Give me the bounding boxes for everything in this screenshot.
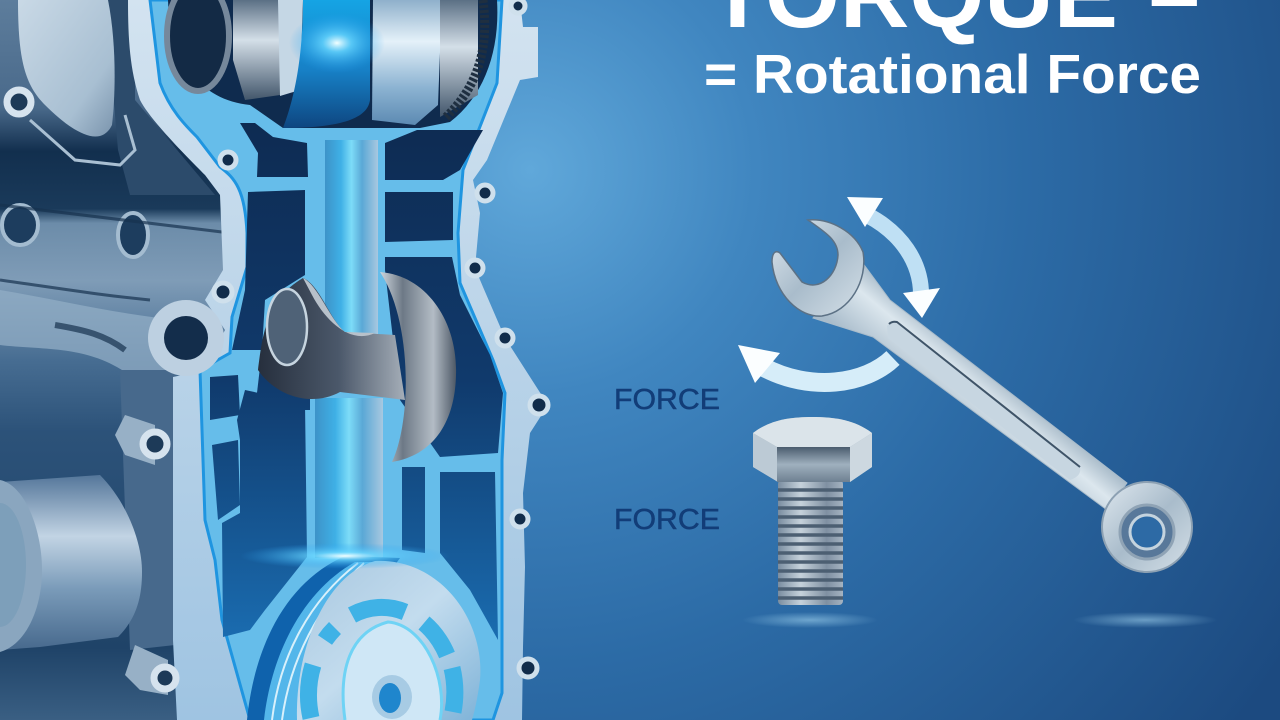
shadow: wrench xyxy=(1073,612,1217,628)
pulley wheel xyxy=(240,543,480,720)
panel right of cylinder xyxy=(120,370,175,650)
boss arm: lower xyxy=(125,645,168,695)
cylinder: lower left xyxy=(0,475,142,652)
casting rib xyxy=(30,115,135,165)
arrow: upper arc xyxy=(847,197,921,297)
wrench open jaw xyxy=(772,220,864,316)
cavities xyxy=(210,123,503,640)
seams xyxy=(0,205,222,300)
rib to port xyxy=(0,290,180,372)
panel: engine cutaway xyxy=(0,0,548,720)
inner web xyxy=(150,0,505,720)
bolt thread xyxy=(778,480,843,605)
boss arm: left xyxy=(115,415,155,465)
dark band beside casting xyxy=(105,0,215,195)
bolt head xyxy=(753,417,872,482)
title xyxy=(704,0,1201,105)
block recesses xyxy=(2,205,148,257)
wrench ring end xyxy=(1102,482,1192,572)
arrowhead: upper arc end xyxy=(903,288,940,318)
housing wall outer xyxy=(128,0,548,720)
block bosses xyxy=(7,90,176,689)
engine block body xyxy=(0,0,245,720)
label: force lower: FORCE xyxy=(614,504,720,536)
port xyxy=(148,300,224,376)
wrench handle xyxy=(813,262,1127,510)
label: force upper: FORCE xyxy=(614,384,720,416)
connecting rod xyxy=(325,140,378,335)
wrench handle slot xyxy=(887,322,1080,480)
wrench with rotation arrows xyxy=(738,197,1192,572)
bolt xyxy=(753,417,872,605)
arrow: lower arc xyxy=(738,345,893,383)
heading: second line: = Rotational Force xyxy=(704,43,1201,105)
top crankshaft assembly xyxy=(167,0,497,128)
housing bolt holes xyxy=(214,0,548,677)
top left casting xyxy=(18,0,115,136)
crank arm xyxy=(258,272,456,462)
shadow: bolt xyxy=(742,612,878,628)
